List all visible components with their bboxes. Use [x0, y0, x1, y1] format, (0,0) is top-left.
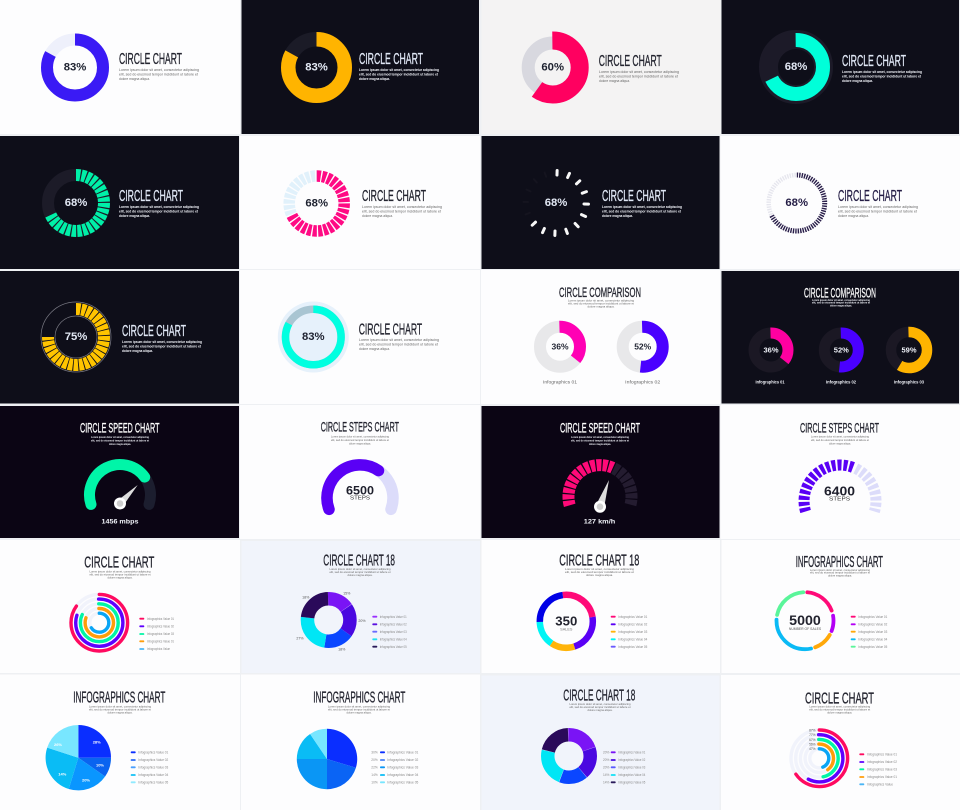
panel: ring on disc 83%: [240, 270, 480, 404]
ring on disc 83%: [278, 302, 349, 372]
description: dolore magna aliqua.: [108, 710, 133, 714]
description: dolore magna aliqua.: [588, 304, 615, 308]
donut chart 83%: [288, 39, 345, 96]
description: Lorem ipsum dolor sit amet, consectetur adipiscing: [90, 570, 151, 574]
description: dolore magna aliqua.: [602, 214, 633, 218]
title: INFOGRAPHICS CHART: [313, 690, 406, 707]
panel: infographics chart thin ring: [722, 540, 960, 673]
steps label: STEPS: [829, 497, 851, 503]
segmented ring 68%: [48, 175, 104, 231]
title: CIRCLE CHART: [805, 690, 874, 707]
ring value labels: 56%: [809, 742, 816, 746]
description: Lorem ipsum dolor sit amet, consectetur adipiscing: [119, 205, 199, 209]
description: elit, sed do eiusmod tempor incididunt ut labore et: [119, 72, 198, 76]
description: dolore magna aliqua.: [122, 349, 153, 353]
description: [119, 205, 199, 218]
legend: Infographics Value 05: [858, 645, 888, 649]
legend: 30%: [371, 750, 378, 754]
title: CIRCLE CHART: [362, 188, 426, 205]
legend: [139, 617, 174, 651]
legend: Infographics Value 02: [387, 758, 419, 762]
tick ring 68%: 68%: [545, 197, 567, 209]
description: dolore magna aliqua.: [586, 573, 613, 577]
legend: Infographics Value 01: [380, 615, 407, 619]
ring value labels: 87%: [809, 728, 816, 732]
slice percentages: 18%: [338, 648, 346, 652]
panel: steps chart purple: [240, 405, 480, 539]
legend: Infographics Value: [147, 647, 170, 651]
legend: Infographics Value 04: [858, 637, 888, 641]
description: elit, sed do eiusmod tempor incididunt ut labore et: [90, 572, 151, 576]
description: dolore magna aliqua.: [348, 573, 373, 577]
legend: Infographics Value 03: [618, 630, 648, 634]
donut 52%: [623, 327, 663, 367]
needle: [594, 480, 609, 513]
description: dolore magna aliqua.: [108, 576, 133, 580]
description: dolore magna aliqua.: [589, 442, 611, 446]
description: elit, sed do eiusmod tempor incididunt ut labore et: [89, 708, 151, 712]
speed value: 1456 mbps: [102, 518, 139, 526]
title: CIRCLE CHART: [599, 53, 662, 70]
description: Lorem ipsum dolor sit amet, consectetur adipiscing: [89, 704, 151, 708]
ring chart: 350: [555, 613, 577, 628]
legend: [851, 615, 888, 649]
donut 52%: [824, 333, 858, 367]
description: [122, 340, 202, 353]
title: CIRCLE CHART: [122, 323, 186, 340]
legend: Infographics Value 03: [147, 632, 174, 636]
description: [842, 70, 922, 83]
panel: circle chart 83% amber dark: [242, 0, 479, 134]
legend: Infographics Value 05: [618, 780, 645, 784]
ring value labels: 77%: [809, 733, 816, 737]
pie labels: 14%: [58, 772, 67, 776]
title: CIRCLE STEPS CHART: [321, 419, 399, 435]
description: [565, 567, 634, 577]
legend: Infographics Value 03: [387, 765, 419, 769]
steps value: 6500: [346, 483, 374, 497]
concentric rings: [791, 730, 848, 787]
title: CIRCLE CHART 18: [563, 688, 635, 705]
legend: Infographics Value 04: [380, 637, 407, 641]
title: CIRCLE CHART: [119, 188, 183, 205]
legend: Infographics Value 04: [387, 773, 419, 777]
description: dolore magna aliqua.: [359, 77, 390, 81]
panel: speed chart pink segmented: [482, 406, 720, 538]
donut 36%: [754, 333, 788, 367]
description: [90, 570, 151, 580]
description: elit, sed do eiusmod tempor incididunt ut labore et: [842, 74, 922, 78]
panel: infographics pie with values: [241, 674, 480, 810]
title: CIRCLE SPEED CHART: [560, 420, 640, 436]
speed value: 127 km/h: [584, 518, 615, 526]
panel: circle chart 18 sales ring: [482, 540, 720, 673]
description: [568, 298, 634, 308]
panel: circle comparison three donuts dark: [722, 271, 959, 404]
description: [811, 434, 869, 446]
donut chart 68%: 68%: [785, 61, 807, 73]
steps value: 6400: [824, 484, 855, 498]
description: [809, 705, 870, 715]
segmented steps gauge: [804, 465, 876, 512]
title: INFOGRAPHICS CHART: [73, 690, 166, 707]
panel: circle chart 83% blue: [0, 0, 240, 134]
description: elit, sed do eiusmod tempor incididunt ut labore et: [362, 210, 441, 214]
description: elit, sed do eiusmod tempor incididunt ut labore et: [91, 438, 149, 442]
description: Lorem ipsum dolor sit amet, consectetur adipiscing: [565, 567, 634, 571]
legend: Infographics Value 02: [618, 622, 648, 626]
legend: Infographics Value 03: [380, 630, 407, 634]
description: Lorem ipsum dolor sit amet, consectetur adipiscing: [811, 434, 869, 438]
description: Lorem ipsum dolor sit amet, consectetur adipiscing: [568, 298, 634, 302]
thin ring chart: 5000: [789, 613, 821, 628]
legend: 14%: [603, 773, 610, 777]
description: elit, sed do eiusmod tempor incididunt ut labore et: [359, 72, 439, 76]
panel: fine tick ring 68%: [720, 136, 960, 269]
donut chart 83%: [47, 40, 103, 96]
legend: Infographics Value 05: [380, 645, 407, 649]
legend: Infographics Value 01: [387, 750, 419, 754]
ring value labels: [809, 728, 816, 751]
steps label: STEPS: [350, 496, 371, 502]
description: Lorem ipsum dolor sit amet, consectetur adipiscing: [599, 70, 679, 74]
description: Lorem ipsum dolor sit amet, consectetur adipiscing: [570, 702, 631, 706]
description: dolore magna aliqua.: [828, 573, 852, 577]
pie chart: [297, 729, 357, 789]
ring on disc 83%: 83%: [302, 331, 325, 343]
description: [838, 205, 918, 218]
description: elit, sed do eiusmod tempor incididunt ut labore et: [359, 342, 438, 346]
description: Lorem ipsum dolor sit amet, consectetur adipiscing: [810, 568, 870, 572]
donut 36%: 36%: [551, 342, 569, 352]
description: [599, 70, 679, 83]
speed gauge: [90, 464, 151, 504]
legend: [372, 615, 407, 649]
description: dolore magna aliqua.: [588, 708, 613, 712]
description: dolore magna aliqua.: [842, 79, 873, 83]
slice percentages: [296, 592, 366, 652]
panel: circle chart 68% teal dark: [722, 0, 959, 134]
donut 59%: 59%: [901, 346, 917, 354]
description: elit, sed do eiusmod tempor incididunt ut labore et: [328, 708, 390, 712]
description: Lorem ipsum dolor sit amet, consectetur adipiscing: [328, 704, 390, 708]
legend: 10%: [371, 780, 378, 784]
slice percentages: 27%: [296, 636, 304, 640]
pie labels: 10%: [96, 762, 104, 768]
legend: Infographics Value 03: [138, 765, 169, 769]
legend: Infographics Value 02: [867, 760, 897, 764]
segmented speed gauge: [568, 465, 632, 505]
ring chart: SALES: [560, 627, 573, 631]
segmented donut: [307, 599, 350, 641]
description: dolore magna aliqua.: [362, 214, 393, 218]
legend: Infographics Value 03: [858, 630, 888, 634]
panel: concentric rings chart: [0, 540, 240, 673]
segmented ring 68%: [289, 176, 344, 231]
ring chart: [537, 592, 595, 650]
legend: 14%: [371, 773, 378, 777]
description: [119, 68, 199, 81]
description: Lorem ipsum dolor sit amet, consectetur adipiscing: [91, 435, 149, 439]
description: [571, 435, 629, 446]
needle: [114, 485, 138, 510]
panel: concentric rings with values: [721, 675, 960, 810]
panel: circle comparison two donuts: [481, 270, 720, 404]
description: [359, 68, 439, 81]
steps gauge: [327, 465, 393, 509]
description: dolore magna aliqua.: [346, 710, 372, 714]
label 01: Infographics 01: [756, 380, 785, 384]
description: dolore magna aliqua.: [827, 711, 852, 715]
donut chart 68%: [768, 40, 824, 94]
panel: speed chart green: [0, 406, 239, 538]
description: dolore magna aliqua.: [838, 214, 869, 218]
legend: Infographics Value 02: [138, 758, 169, 762]
description: elit, sed do eiusmod tempor incididunt ut labore et: [565, 570, 634, 574]
legend: Infographics Value 01: [147, 617, 174, 621]
label 01: Infographics 01: [543, 380, 577, 384]
legend: 22%: [371, 765, 378, 769]
segmented ring 68%: 68%: [305, 198, 328, 210]
donut 36%: 36%: [763, 346, 779, 354]
slice percentages: 15%: [343, 592, 351, 596]
ring value labels: 67%: [809, 738, 816, 742]
title: CIRCLE CHART 18: [323, 552, 395, 569]
segmented ring 75%: 75%: [65, 331, 87, 343]
description: elit, sed do eiusmod tempor incididunt ut labore et: [811, 438, 869, 442]
title: CIRCLE CHART: [84, 554, 155, 571]
description: [330, 567, 391, 577]
panel: segmented ring 68% pink: [240, 136, 480, 269]
title: CIRCLE CHART: [359, 322, 423, 338]
legend: [131, 750, 169, 784]
description: Lorem ipsum dolor sit amet, consectetur adipiscing: [571, 435, 629, 439]
donut chart 83%: 83%: [64, 62, 86, 74]
description: Lorem ipsum dolor sit amet, consectetur adipiscing: [842, 70, 922, 74]
description: [91, 435, 149, 446]
legend: 14%: [603, 780, 610, 784]
slice percentages: 20%: [358, 619, 366, 623]
segmented ring 68%: 68%: [65, 197, 87, 209]
legend: Infographics Value 02: [858, 622, 888, 626]
description: dolore magna aliqua.: [109, 442, 131, 446]
legend: Infographics Value 03: [867, 767, 897, 771]
description: elit, sed do eiusmod tempor incididunt ut labore et: [810, 571, 870, 575]
panel: steps chart purple segmented: [720, 405, 960, 539]
legend: Infographics Value 01: [867, 752, 897, 756]
panel: segmented ring 68% green dark: [0, 136, 239, 269]
description: Lorem ipsum dolor sit amet, consectetur adipiscing: [122, 340, 202, 344]
description: elit, sed do eiusmod tempor incididunt ut labore et: [330, 570, 391, 574]
title: CIRCLE COMPARISON: [559, 284, 641, 300]
title: CIRCLE CHART: [838, 188, 902, 205]
title: CIRCLE CHART: [602, 188, 666, 205]
legend: Infographics Value 01: [138, 750, 169, 754]
description: Lorem ipsum dolor sit amet, consectetur adipiscing: [812, 298, 870, 302]
title: CIRCLE CHART: [359, 51, 423, 68]
title: CIRCLE CHART: [119, 51, 182, 68]
description: dolore magna aliqua.: [119, 214, 150, 218]
panel: circle chart 18 purple donut: [242, 541, 480, 673]
description: elit, sed do eiusmod tempor incididunt ut labore et: [119, 210, 199, 214]
donut chart 83%: 83%: [305, 62, 328, 74]
concentric rings: [71, 594, 128, 651]
description: elit, sed do eiusmod tempor incididunt ut labore et: [812, 301, 870, 305]
description: [602, 205, 682, 218]
legend: Infographics Value 04: [138, 773, 169, 777]
description: [328, 704, 390, 714]
donut chart 60%: 60%: [541, 62, 564, 74]
description: elit, sed do eiusmod tempor incididunt ut labore et: [122, 344, 202, 348]
description: Lorem ipsum dolor sit amet, consectetur adipiscing: [602, 205, 682, 209]
legend: Infographics Value 05: [387, 780, 419, 784]
legend: [611, 615, 648, 649]
legend: Infographics Value: [867, 782, 893, 786]
description: dolore magna aliqua.: [349, 442, 371, 446]
description: [359, 338, 439, 351]
legend: 20%: [603, 750, 610, 754]
pie labels: 26%: [54, 742, 62, 747]
legend: Infographics Value 01: [618, 615, 648, 619]
legend: Infographics Value 02: [147, 624, 174, 628]
panel: circle comparison three donuts dark: CIRCLE COMPARISON: [804, 284, 876, 300]
legend: 20%: [603, 758, 610, 762]
description: [810, 568, 870, 577]
panel: infographics pie with labels: [0, 674, 240, 810]
description: Lorem ipsum dolor sit amet, consectetur adipiscing: [119, 68, 199, 72]
fine tick ring 68%: 68%: [785, 197, 808, 209]
legend: [603, 750, 645, 784]
description: Lorem ipsum dolor sit amet, consectetur adipiscing: [838, 205, 918, 209]
legend: Infographics Value 02: [618, 758, 645, 762]
legend: Infographics Value 05: [618, 645, 648, 649]
donut 36%: [540, 327, 580, 367]
description: [570, 702, 631, 712]
description: Lorem ipsum dolor sit amet, consectetur adipiscing: [359, 338, 439, 342]
description: dolore magna aliqua.: [599, 79, 630, 83]
description: [812, 298, 870, 307]
label 02: Infographics 02: [625, 380, 661, 384]
description: Lorem ipsum dolor sit amet, consectetur adipiscing: [359, 68, 439, 72]
thin ring chart: NUMBER OF SALES: [789, 627, 822, 631]
description: [362, 205, 442, 218]
title: CIRCLE SPEED CHART: [80, 420, 160, 436]
legend: 20%: [603, 765, 610, 769]
description: dolore magna aliqua.: [829, 442, 851, 446]
description: dolore magna aliqua.: [359, 347, 390, 351]
title: CIRCLE CHART 18: [559, 552, 639, 569]
description: elit, sed do eiusmod tempor incididunt ut labore et: [838, 210, 917, 214]
donut 52%: 52%: [634, 342, 652, 352]
legend: Infographics Value 01: [858, 615, 888, 619]
label 03: Infographics 03: [894, 380, 924, 384]
legend: [371, 750, 419, 784]
panel: circle chart 60% pink: [482, 0, 720, 134]
description: dolore magna aliqua.: [119, 77, 150, 81]
slice percentages: 18%: [302, 596, 310, 600]
fine tick ring 68%: [769, 175, 825, 231]
legend: [859, 752, 897, 786]
label 02: Infographics 02: [826, 380, 856, 384]
donut chart 60%: [526, 40, 580, 94]
panel: circle chart 18 donut with values: [482, 676, 720, 810]
description: elit, sed do eiusmod tempor incididunt ut labore et: [570, 705, 631, 709]
tick ring 68%: [524, 171, 588, 235]
description: Lorem ipsum dolor sit amet, consectetur adipiscing: [362, 205, 442, 209]
legend: Infographics Value 02: [380, 622, 407, 626]
description: elit, sed do eiusmod tempor incididunt ut labore et: [571, 438, 629, 442]
segmented ring 75%: [41, 302, 111, 372]
description: dolore magna aliqua.: [830, 303, 852, 307]
legend: Infographics Value 01: [147, 639, 174, 643]
legend: Infographics Value 01: [867, 775, 897, 779]
panel: tick ring 68% dark: [482, 136, 720, 269]
description: elit, sed do eiusmod tempor incididunt ut labore et: [568, 302, 634, 306]
description: elit, sed do eiusmod tempor incididunt ut labore et: [331, 438, 389, 442]
legend: Infographics Value 05: [138, 780, 169, 784]
pie labels: 20%: [82, 778, 90, 782]
description: elit, sed do eiusmod tempor incididunt ut labore et: [599, 74, 678, 78]
description: Lorem ipsum dolor sit amet, consectetur adipiscing: [809, 705, 870, 709]
pie labels: [54, 740, 104, 782]
description: Lorem ipsum dolor sit amet, consectetur adipiscing: [330, 567, 391, 571]
description: elit, sed do eiusmod tempor incididunt ut labore et: [809, 708, 870, 712]
pie chart: [46, 725, 111, 790]
description: [89, 704, 151, 714]
thin ring chart: [776, 592, 834, 649]
description: Lorem ipsum dolor sit amet, consectetur adipiscing: [331, 434, 389, 438]
legend: Infographics Value 04: [618, 773, 645, 777]
legend: Infographics Value 03: [618, 765, 645, 769]
description: elit, sed do eiusmod tempor incididunt ut labore et: [602, 210, 682, 214]
panel: segmented ring 75% yellow dark: [0, 271, 239, 404]
description: [331, 434, 389, 446]
segmented donut: [548, 735, 590, 777]
title: CIRCLE CHART: [842, 53, 906, 70]
donut 52%: 52%: [834, 346, 849, 354]
pie labels: 28%: [93, 740, 101, 744]
legend: 20%: [371, 758, 378, 762]
ring value labels: 47%: [809, 747, 816, 751]
donut 59%: [891, 332, 927, 368]
legend: Infographics Value 01: [618, 750, 645, 754]
legend: Infographics Value 04: [618, 637, 648, 641]
title: CIRCLE STEPS CHART: [800, 420, 879, 436]
